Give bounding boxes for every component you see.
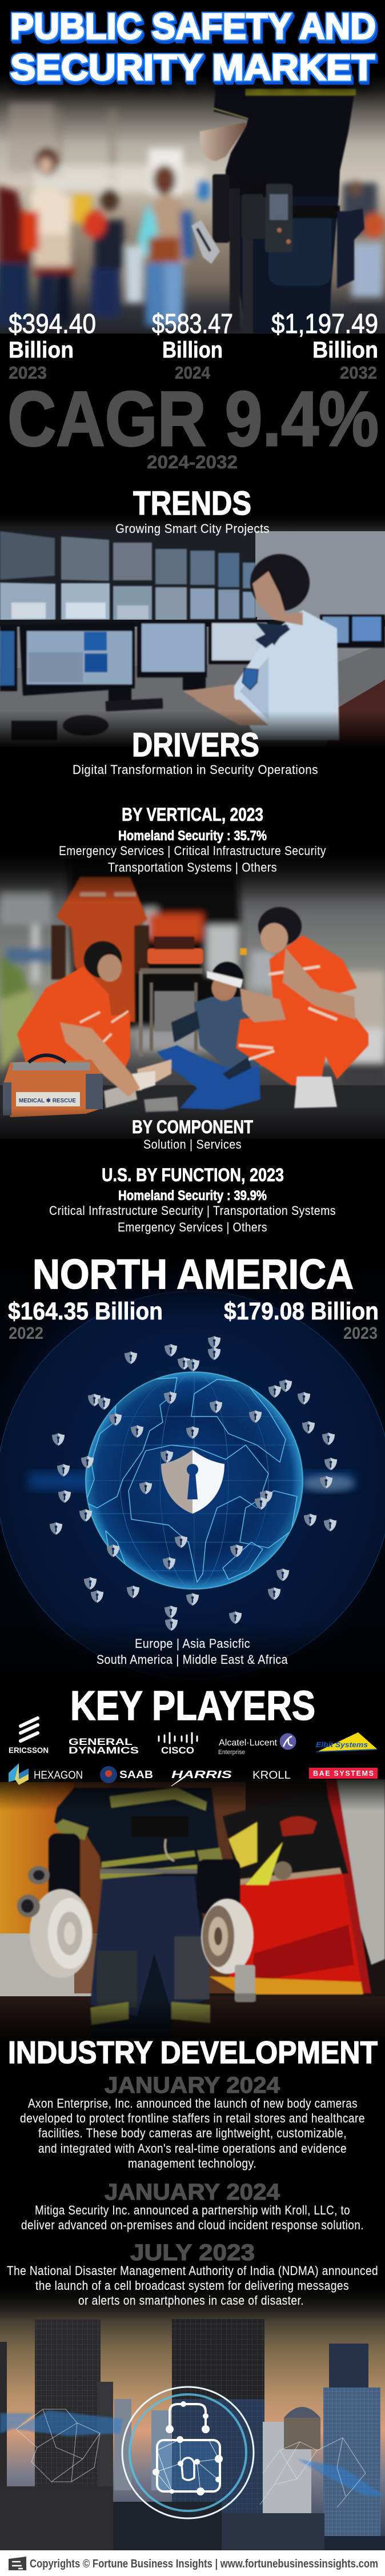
- segment: by vertical: Transportation Systems | Others: [108, 860, 277, 874]
- development: January 2024 Axon: facilities. These body cameras are lightweight, customizable,: [38, 2126, 347, 2140]
- stat: 2023 market size: Billion: [9, 338, 74, 363]
- segment: by vertical: Homeland Security : 35.7%: [118, 828, 267, 844]
- stat: north america 2022: $164.35 Billion: [8, 1298, 163, 1325]
- segment: by component: [132, 1117, 253, 1151]
- shield icons: [50, 1336, 337, 1631]
- buildings: [0, 2319, 385, 2550]
- logo: General Dynamics: DYNAMICS: [69, 1745, 139, 1756]
- panel: globe with shields: [0, 1257, 385, 1685]
- logo: Alcatel-Lucent: Alcatel·Lucent: [219, 1738, 278, 1748]
- heading: trends: TRENDS: [133, 485, 251, 522]
- stat: 2023 market size: $394.40: [9, 309, 96, 339]
- horizontal glow: [29, 1472, 354, 1491]
- logo: Ericsson: [9, 1718, 49, 1755]
- stat: 2023 market size: [9, 309, 96, 383]
- stat: 2032 market size: [271, 309, 378, 383]
- fire truck: [208, 1779, 385, 1995]
- development: July 2023 NDMA: or alerts on smartphones in case of disaster.: [78, 2293, 304, 2308]
- stat: 2032 market size: 2032: [340, 363, 377, 383]
- logo: Elbit Systems: [316, 1732, 377, 1752]
- stat: 2024 market size: Billion: [162, 338, 223, 363]
- blue data ribbons: [0, 2410, 385, 2496]
- development: January 2024 Axon: management technology.: [128, 2156, 256, 2170]
- logo: Alcatel-Lucent: Enterprise: [218, 1749, 245, 1756]
- logo: Hexagon: [9, 1763, 83, 1785]
- development: January 2024 Axon: JANUARY 2024: [105, 2073, 280, 2098]
- segment: by component: Solution | Services: [143, 1137, 242, 1151]
- segment: U.S. by function: Emergency Services | Others: [118, 1220, 267, 1234]
- segment: by component: BY COMPONENT: [132, 1117, 253, 1137]
- heading: drivers: [73, 727, 318, 777]
- logo: Harris: [171, 1769, 232, 1786]
- panel: control room photo: [0, 511, 385, 748]
- logo: Alcatel-Lucent: [218, 1733, 296, 1756]
- development: January 2024 Mitiga: JANUARY 2024: [105, 2180, 280, 2205]
- stat: 2024 market size: $583.47: [152, 309, 233, 339]
- medical bag: [3, 1056, 103, 1117]
- logo: General Dynamics: GENERAL: [69, 1736, 133, 1747]
- panel: police officer photo: [0, 74, 385, 346]
- panel: ambulance rescue photo: [0, 851, 385, 1139]
- stat: north america 2023: 2023: [343, 1324, 378, 1343]
- heading: north america: NORTH AMERICA: [33, 1251, 354, 1298]
- stat: north america 2022: 2022: [9, 1324, 43, 1343]
- segment: by vertical: [59, 804, 326, 874]
- heading: key players: KEY PLAYERS: [70, 1683, 315, 1729]
- medical bag: MEDICAL ✱ RESCUE: [19, 1098, 76, 1104]
- segment: by vertical: Emergency Services | Critical Infrastructure Security: [59, 844, 326, 858]
- video wall: [0, 531, 255, 621]
- officer: [191, 86, 364, 346]
- segment: U.S. by function: Homeland Security : 39.9%: [118, 1188, 267, 1203]
- segment: U.S. by function: [49, 1165, 336, 1234]
- network lines: [16, 2409, 366, 2507]
- development: January 2024 Axon: and integrated with Axon's real-time operations and evidence: [38, 2141, 347, 2156]
- panel: smart city skyline photo: [0, 2279, 385, 2550]
- heading: trends: Growing Smart City Projects: [115, 521, 270, 536]
- monitors: [0, 615, 385, 740]
- stat: 2024 market size: [152, 309, 233, 383]
- logo: Kroll: KROLL: [252, 1770, 291, 1781]
- segment: by vertical: BY VERTICAL, 2023: [122, 804, 263, 825]
- blurred background: [0, 866, 385, 1077]
- hose rolls: [17, 1866, 256, 2002]
- development: January 2024 Mitiga: [21, 2180, 364, 2232]
- paramedic left: [17, 941, 140, 1097]
- icon: Fortune Business Insights logo: [9, 2557, 26, 2570]
- logo: Cisco: CISCO: [161, 1745, 194, 1756]
- stat: north america 2022: [8, 1298, 163, 1343]
- development: January 2024 Axon: [20, 2073, 365, 2170]
- logo: BAE Systems: [309, 1768, 378, 1779]
- title: PUBLIC SAFETY AND: [10, 6, 376, 47]
- logo: Cisco: [159, 1733, 197, 1756]
- stat: 2032 market size: Billion: [312, 338, 378, 363]
- development: July 2023 NDMA: the launch of a cell broadcast system for delivering messages: [35, 2278, 349, 2293]
- logo: Saab: [100, 1766, 153, 1783]
- CAGR figure: 2024-2032: [147, 452, 238, 472]
- footer: [0, 2550, 385, 2576]
- patient: [104, 962, 263, 1112]
- regions list: Europe | Asia Pasicfic: [135, 1636, 250, 1651]
- regions list: [97, 1636, 288, 1667]
- segment: U.S. by function: Critical Infrastructure Security | Transportation Systems: [49, 1203, 336, 1218]
- logo: Ericsson: ERICSSON: [9, 1746, 49, 1755]
- title: SECURITY MARKET: [10, 47, 375, 88]
- blurred crowd: [0, 103, 385, 334]
- heading: drivers: Digital Transformation in Security Operations: [73, 763, 318, 777]
- segment: U.S. by function: U.S. BY FUNCTION, 2023: [102, 1165, 284, 1185]
- heading: trends: [115, 485, 270, 536]
- logo: Hexagon: HEXAGON: [34, 1770, 83, 1781]
- standing paramedic: [51, 877, 149, 1022]
- development: July 2023 NDMA: JULY 2023: [130, 2240, 255, 2265]
- development: July 2023 NDMA: [7, 2240, 378, 2308]
- firefighter: [49, 1788, 240, 2042]
- stat: north america 2023: [224, 1298, 379, 1343]
- panel: firefighter photo: [0, 1771, 385, 2045]
- padlock in circle: [122, 2387, 254, 2518]
- paramedic right: [236, 907, 368, 1108]
- logo: Saab: SAAB: [119, 1769, 153, 1780]
- logo: General Dynamics: [69, 1736, 139, 1756]
- logo: BAE Systems: BAE SYSTEMS: [313, 1770, 374, 1777]
- stat: 2024 market size: 2024: [175, 363, 211, 383]
- desk: [0, 643, 385, 698]
- stat: 2023 market size: 2023: [9, 363, 47, 383]
- stretcher: [139, 937, 247, 1057]
- title: [10, 6, 376, 88]
- logo: Elbit Systems: Elbit Systems: [316, 1740, 368, 1749]
- logo: Harris: HARRIS: [171, 1769, 232, 1780]
- central shield: [161, 1450, 224, 1514]
- operator: [183, 554, 339, 740]
- globe: [86, 1371, 303, 1591]
- heading: drivers: DRIVERS: [132, 727, 259, 764]
- regions list: South America | Middle East & Africa: [97, 1652, 288, 1667]
